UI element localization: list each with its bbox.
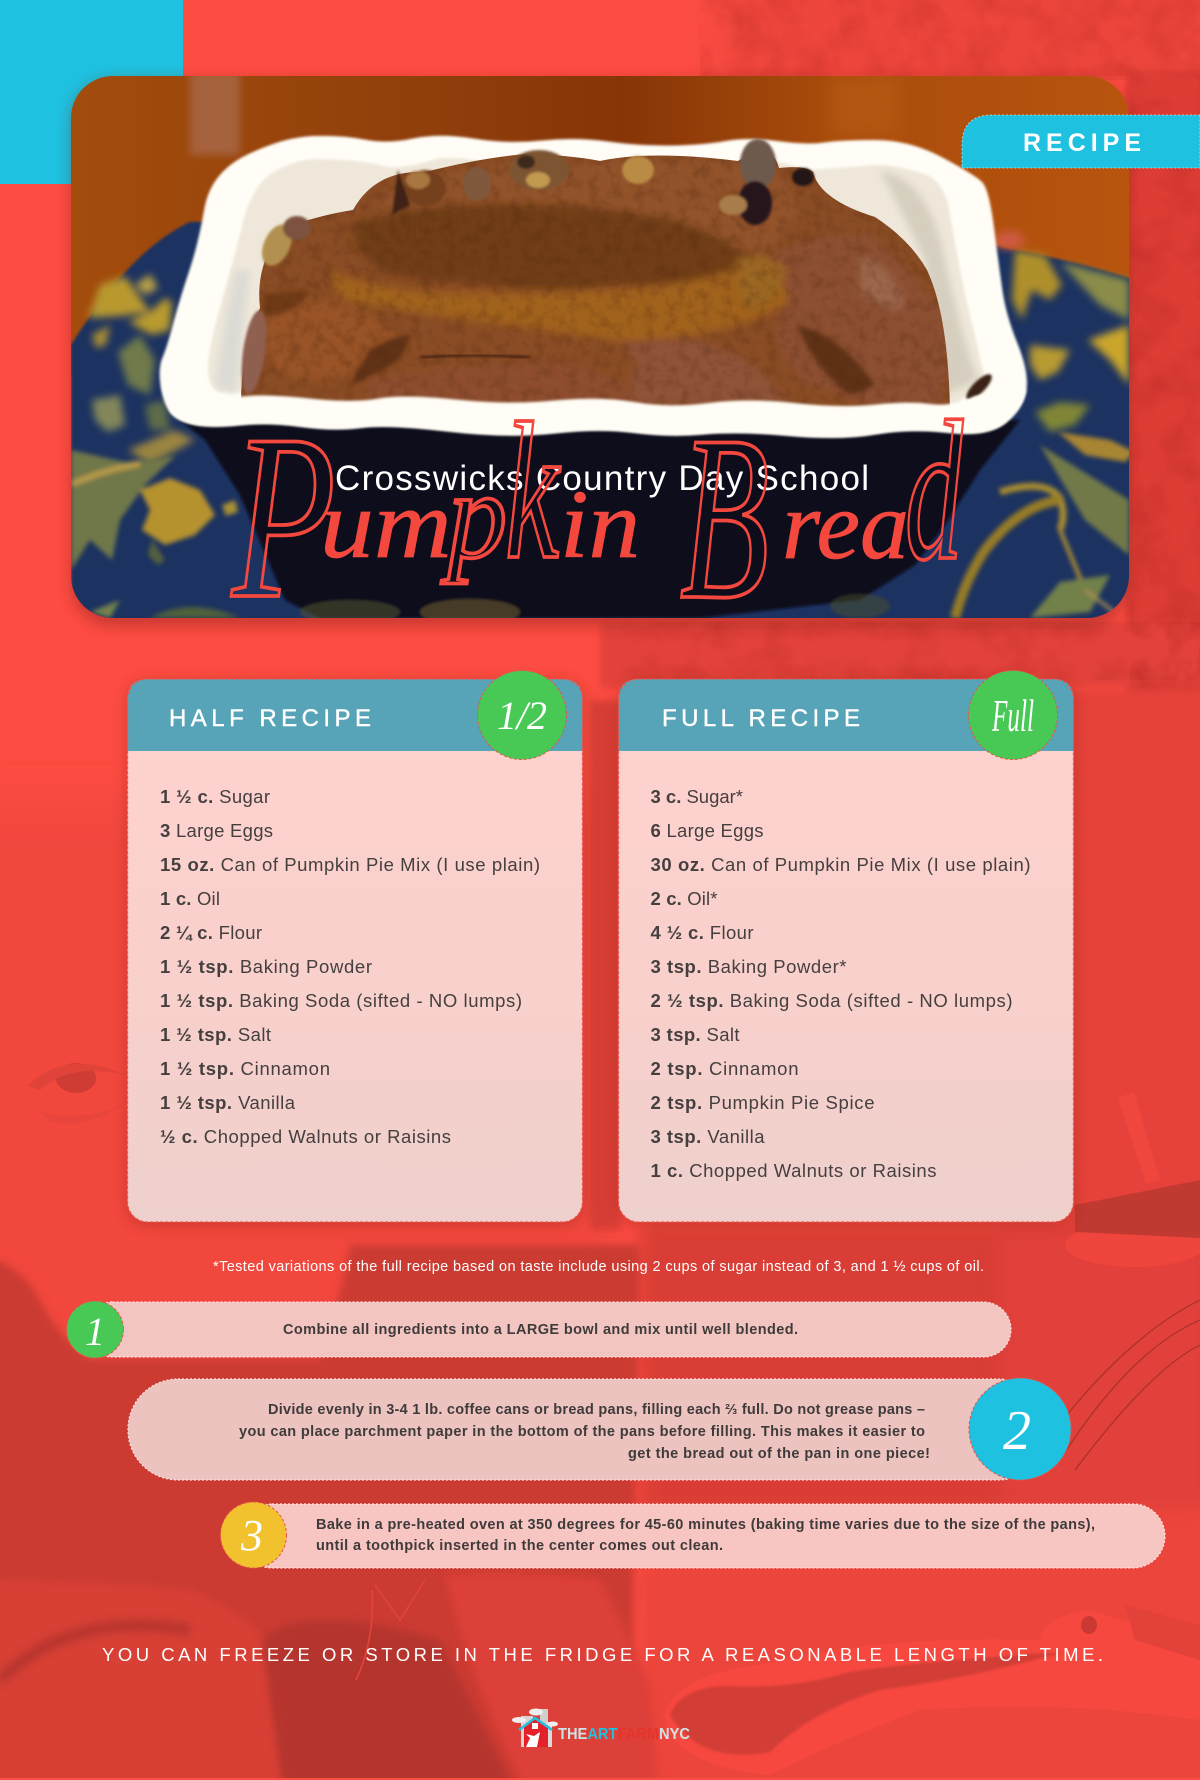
step 2 [128,1378,1071,1480]
heading: Pumpkin Bread script title: P [230,387,336,648]
panel: full recipe [618,670,1075,1225]
badge: full [968,670,1058,760]
crust top [580,157,779,168]
step 3 text: until a toothpick inserted in the center comes out clean. [316,1538,723,1554]
ingredient list: half recipe: 1 ½ tsp. Salt [160,1024,271,1045]
panel header: half recipe: HALF RECIPE [169,705,371,732]
step 1 text: Combine all ingredients into a LARGE bowl and mix until well blended. [283,1322,798,1338]
ingredient list: full recipe: 3 tsp. Baking Powder* [650,956,846,977]
logo: The Art Farm NYC [512,1708,690,1747]
step 1 badge [66,1301,124,1358]
step 2 text: you can place parchment paper in the bottom of the pans before filling. This makes it easier to [239,1424,925,1440]
ingredient list: half recipe: ½ c. Chopped Walnuts or Raisins [160,1126,451,1147]
photo: walnuts [237,139,995,403]
footnote: tested variations: *Tested variations of the full recipe based on taste include using 2 cups of sugar instead of 3, and 1 ½ cups of oil. [213,1259,984,1275]
background: spatula and spoon [0,1605,1200,1780]
panel: half recipe [127,670,583,1225]
ingredient list: full recipe: 3 tsp. Vanilla [650,1126,765,1147]
cyan corner square [0,0,183,184]
ingredient list: full recipe: 2 tsp. Pumpkin Pie Spice [650,1092,874,1113]
golden band [332,266,789,342]
tab: recipe [962,115,1200,168]
badge: full: Full [991,690,1034,741]
photo: pumpkin bread in a dish [71,70,1135,625]
ingredient list: full recipe: 1 c. Chopped Walnuts or Raisins [650,1160,936,1181]
heading: Pumpkin Bread script title [230,381,964,649]
step 3 text [316,1517,1095,1554]
panel header: half recipe [128,679,582,751]
dark upper lump [353,205,762,292]
ingredient list: full recipe: 2 c. Oil* [650,888,718,909]
subheading: school name: Crosswicks Country Day School [335,459,869,498]
background: child's shirt [0,1245,660,1780]
heading: Pumpkin Bread script title: k [505,384,561,600]
panel header: full recipe: FULL RECIPE [662,705,860,732]
step 2 text: Divide evenly in 3-4 1 lb. coffee cans or bread pans, filling each ⅔ full. Do not grease pans – [268,1402,925,1418]
badge: 1/2: 1/2 [497,693,547,738]
ingredient list: half recipe: 1 c. Oil [160,888,220,909]
ingredient list: full recipe: 3 c. Sugar* [650,786,743,807]
photo: loaf [241,154,950,408]
ingredient list: half recipe: 1 ½ c. Sugar [160,786,270,807]
ingredient list: full recipe: 3 tsp. Salt [650,1024,740,1045]
photo: white scalloped rim [160,136,1027,437]
ingredient list: full recipe [650,786,1030,1181]
ingredient list: half recipe: 15 oz. Can of Pumpkin Pie Mix (I use plain) [160,854,540,875]
ingredient list: half recipe: 1 ½ tsp. Cinnamon [160,1058,330,1079]
step 3 text: Bake in a pre-heated oven at 350 degrees for 45-60 minutes (baking time varies due to the size of the pans), [316,1517,1095,1533]
background: child's face [0,800,620,1360]
background: floral top right [600,0,1200,710]
icon: barn and skyline [512,1708,558,1747]
step 1 [66,1301,1011,1358]
heading: Pumpkin Bread script title: um [320,470,452,579]
ingredient list: full recipe: 4 ½ c. Flour [650,922,754,943]
heading: Pumpkin Bread script title: d [905,381,964,602]
ingredient list: full recipe: 2 ½ tsp. Baking Soda (sifted - NO lumps) [650,990,1012,1011]
photo: dish interior [208,158,984,412]
photo: wood table [71,70,1129,376]
badge: 1/2 [478,670,566,760]
lower centre crust [372,366,634,402]
right lump [770,234,947,410]
heading: Pumpkin Bread script title: p [440,447,507,585]
photo shadow [71,80,1129,626]
step 2 text: get the bread out of the pan in one piece! [628,1446,930,1462]
photo: front rim [162,385,1026,437]
heading: Pumpkin Bread script title: rea [782,472,909,580]
step 3 [220,1502,1165,1568]
logo: The Art Farm NYC: THEARTFARMNYC [558,1726,690,1743]
step 3 badge [220,1502,286,1568]
ingredient list: full recipe: 30 oz. Can of Pumpkin Pie Mix (I use plain) [650,854,1030,875]
ingredient list: half recipe: 2 ¼ c. Flour [160,922,262,943]
ingredient list: half recipe: 1 ½ tsp. Vanilla [160,1092,296,1113]
heading: Pumpkin Bread script title: B [680,388,769,649]
ingredient list: half recipe: 1 ½ tsp. Baking Powder [160,956,372,977]
ingredient list: full recipe: 6 Large Eggs [650,820,764,841]
ingredient list: half recipe [160,786,540,1147]
photo: dark dish body [170,412,1020,625]
ingredient list: half recipe: 3 Large Eggs [160,820,273,841]
storage note: YOU CAN FREEZE OR STORE IN THE FRIDGE FOR A REASONABLE LENGTH OF TIME. [102,1644,1103,1665]
tab: recipe: RECIPE [1023,129,1141,157]
step 1 badge: 1 [85,1309,105,1354]
lower left lump [266,300,394,380]
ingredient list: half recipe: 1 ½ tsp. Baking Soda (sifted - NO lumps) [160,990,522,1011]
step 2 badge [969,1378,1071,1480]
step 2 badge: 2 [1003,1400,1031,1462]
background: right side tones [590,690,1200,1780]
panel header: full recipe [618,679,1074,751]
ingredient list: full recipe: 2 tsp. Cinnamon [650,1058,798,1079]
step 3 badge: 3 [240,1511,263,1560]
step 2 text [239,1402,930,1462]
heading: Pumpkin Bread script title: in [560,469,640,578]
photo: quilted placemat [71,220,1135,625]
